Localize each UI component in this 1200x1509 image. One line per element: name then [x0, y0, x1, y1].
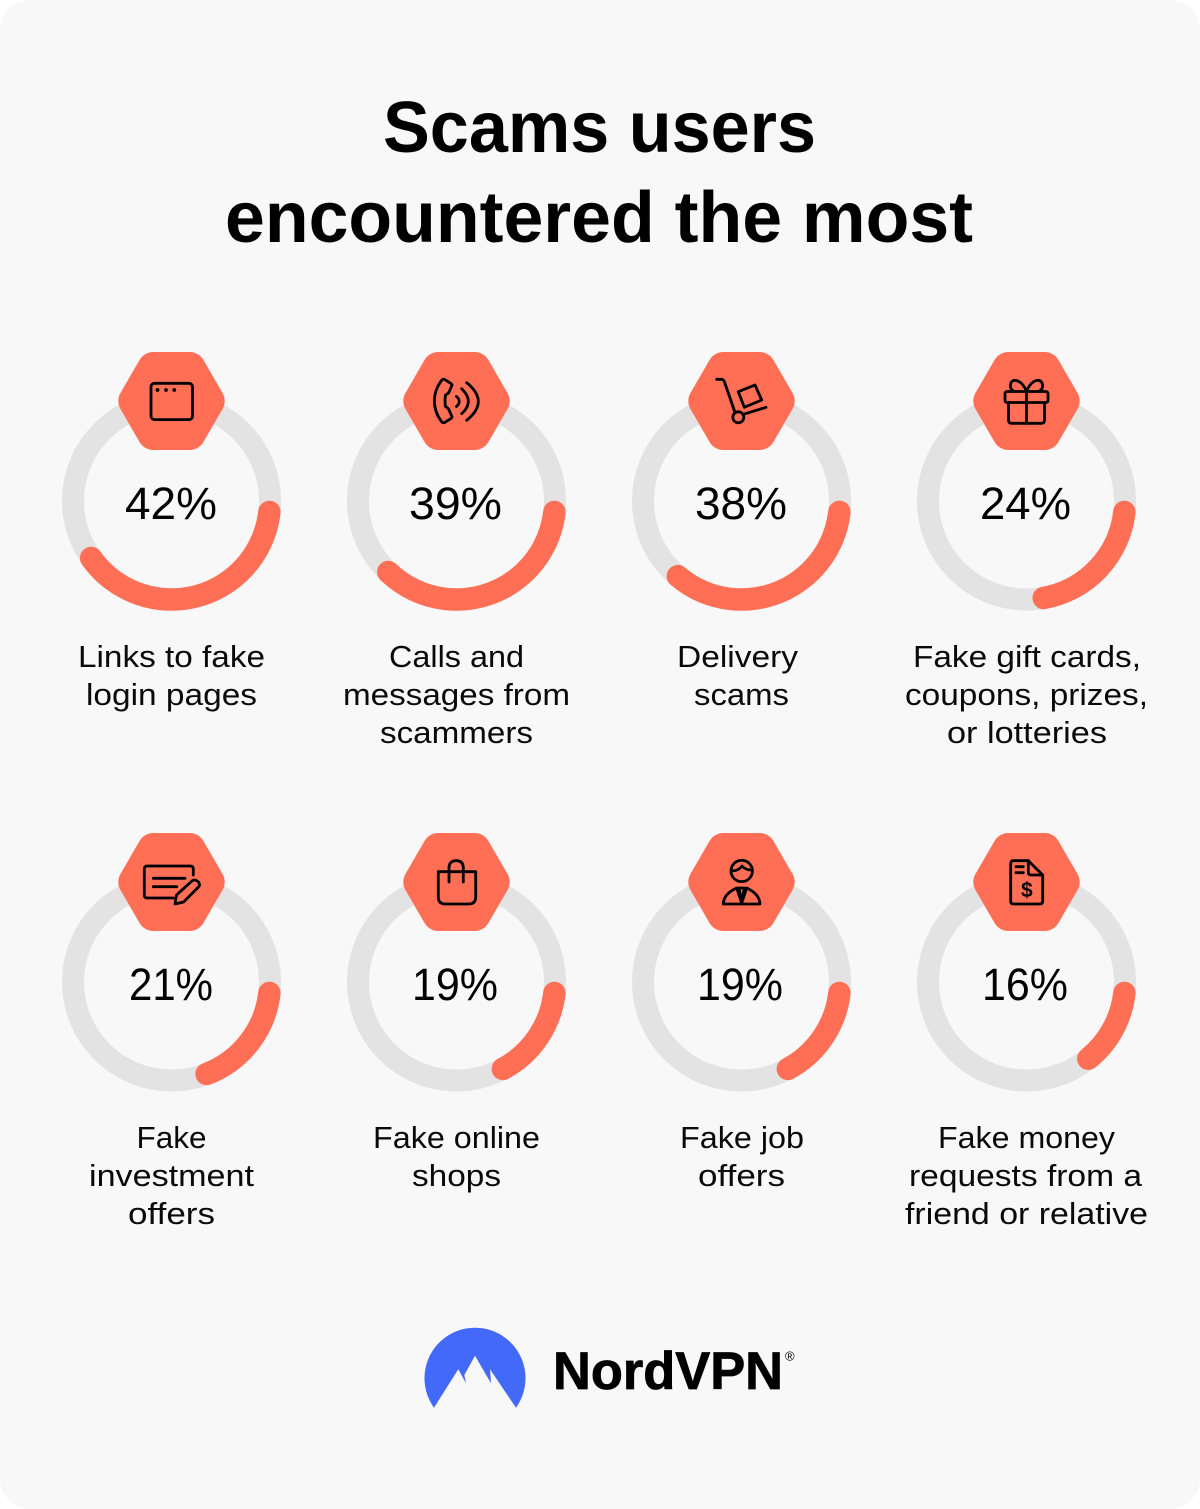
label — [905, 639, 1148, 750]
label: investment — [89, 1158, 254, 1193]
label: Fake online — [373, 1120, 540, 1155]
donut chart: 38% — [633, 392, 850, 610]
icon: browser window — [134, 368, 209, 434]
title: Scams users — [383, 88, 816, 168]
donut chart: 21% — [63, 873, 280, 1091]
panel: calls and messages from scammers — [343, 368, 570, 750]
label: Fake — [136, 1120, 206, 1155]
panel: fake online shops — [348, 849, 565, 1193]
donut chart: 16% — [918, 873, 1135, 1091]
donut chart: 19% — [348, 873, 565, 1091]
value: 19% — [697, 959, 783, 1010]
label: requests from a — [909, 1158, 1143, 1193]
registered mark: ® — [785, 1349, 795, 1364]
icon: gift box — [989, 368, 1064, 434]
donut chart: 19% — [633, 873, 850, 1091]
label: Links to fake — [78, 639, 265, 674]
label: Fake gift cards, — [913, 639, 1141, 674]
label — [89, 1120, 254, 1231]
label: coupons, prizes, — [905, 677, 1148, 712]
label: offers — [128, 1196, 215, 1231]
label: Delivery — [677, 639, 799, 674]
icon: phone with signal waves — [419, 368, 494, 434]
label: or lotteries — [947, 715, 1107, 750]
panel: delivery scams — [633, 368, 850, 712]
icon: person in suit — [704, 849, 779, 915]
label — [78, 639, 265, 712]
label: shops — [412, 1158, 501, 1193]
panel: fake gift cards, coupons, prizes, or lotteries — [905, 368, 1148, 750]
panel: fake money requests from a friend or relative — [905, 849, 1148, 1231]
title — [225, 88, 973, 258]
label — [343, 639, 570, 750]
label: scammers — [380, 715, 533, 750]
logo: NordVPN — [425, 1328, 795, 1408]
icon: document with pencil — [134, 849, 209, 915]
value: 19% — [412, 959, 498, 1010]
icon: invoice with dollar sign: $ — [1021, 879, 1033, 902]
label — [905, 1120, 1148, 1231]
label: login pages — [86, 677, 257, 712]
icon: shopping bag — [419, 849, 494, 915]
label — [677, 639, 799, 712]
value: 21% — [129, 959, 213, 1010]
panel: fake investment offers — [63, 849, 280, 1231]
label: friend or relative — [905, 1196, 1148, 1231]
label: scams — [694, 677, 789, 712]
panel: fake job offers — [633, 849, 850, 1193]
wordmark: NordVPN — [553, 1342, 783, 1401]
label — [680, 1120, 804, 1193]
donut chart: 24% — [918, 392, 1135, 610]
donut chart: 42% — [63, 392, 280, 610]
label: Fake job — [680, 1120, 804, 1155]
value: 42% — [125, 478, 217, 529]
label — [373, 1120, 540, 1193]
label: offers — [698, 1158, 785, 1193]
value: 38% — [695, 478, 787, 529]
icon: hand truck with box — [704, 368, 779, 434]
icon: NordVPN mountain — [425, 1328, 526, 1408]
donut chart: 39% — [348, 392, 565, 610]
title: encountered the most — [225, 178, 973, 258]
value: 39% — [409, 478, 502, 529]
label: messages from — [343, 677, 570, 712]
value: 24% — [980, 478, 1071, 529]
value: 16% — [982, 959, 1068, 1010]
icon: invoice with dollar sign — [989, 849, 1064, 915]
label: Calls and — [389, 639, 524, 674]
panel: links to fake login pages — [63, 368, 280, 712]
label: Fake money — [938, 1120, 1116, 1155]
